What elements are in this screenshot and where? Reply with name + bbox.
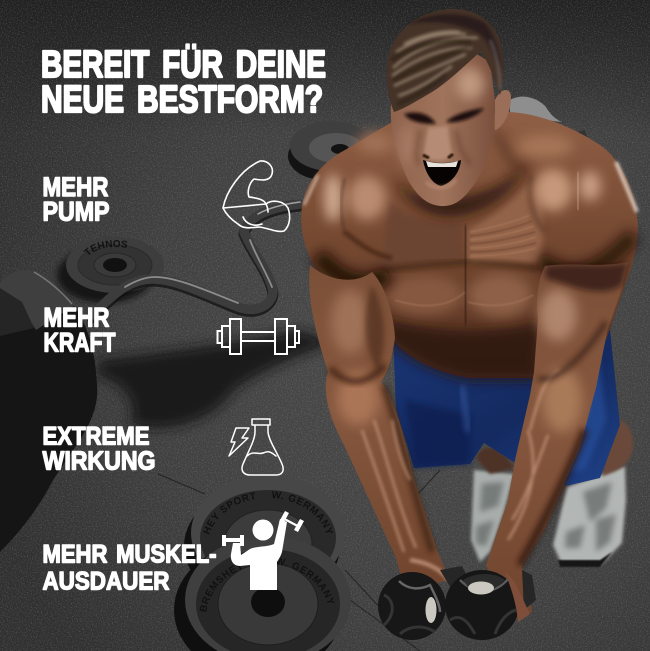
ear (495, 90, 511, 130)
weight plate, upper right of title (288, 121, 372, 180)
title (41, 43, 326, 121)
stacked weight plates, bottom (174, 476, 351, 651)
hair (387, 9, 504, 112)
mouth (423, 160, 461, 186)
benefit: extreme wirkung (42, 422, 156, 476)
knees (476, 420, 633, 476)
title: BEREIT FÜR DEINE (41, 43, 326, 86)
chest divisions (465, 225, 466, 325)
torso and shoulders (301, 112, 638, 380)
left arm (309, 265, 450, 590)
icon: dumbbell (218, 319, 299, 354)
title: NEUE BESTFORM? (41, 79, 323, 121)
benefit: mehr muskelausdauer (42, 540, 216, 596)
deltoid highlights (348, 176, 386, 220)
weight plate, left: TEHNOS (84, 240, 128, 255)
left shoe (471, 470, 514, 562)
benefit: extreme wirkung: WIRKUNG (42, 446, 156, 476)
stacked weight plates, bottom: BREMSHEY (200, 566, 241, 612)
athlete in push-up position (301, 9, 638, 640)
right shoe (553, 466, 626, 567)
weight plate, left (54, 237, 164, 306)
icon: person lifting dumbbells (222, 511, 304, 590)
right arm (486, 262, 628, 620)
benefit: extreme wirkung: EXTREME (42, 422, 150, 450)
benefit: mehr pump: PUMP (42, 196, 110, 226)
hair strands (392, 32, 478, 96)
benefit: mehr kraft: MEHR (44, 302, 110, 332)
stacked weight plates, bottom: W. GERMANY (277, 558, 335, 603)
benefit: mehr kraft (44, 302, 116, 358)
eye sockets and brows (404, 108, 484, 124)
abdominal block (387, 275, 463, 315)
icon: flask with lightning bolt (229, 419, 283, 475)
dumbbell, right hand (445, 570, 536, 640)
benefit: mehr muskelausdauer: MEHR MUSKEL- (42, 540, 216, 568)
under chin shadow (392, 160, 528, 217)
curl bar (92, 202, 300, 318)
head (387, 9, 511, 206)
stacked weight plates, bottom: HEY SPORT (203, 492, 255, 534)
forehead highlight (456, 68, 484, 100)
belly shadow (385, 318, 540, 380)
right pectoral (468, 178, 543, 264)
stacked weight plates, bottom: W. GERMANY (272, 491, 333, 533)
benefit: mehr pump: MEHR (42, 172, 108, 202)
dumbbell, left hand (378, 566, 470, 640)
icon: flexed biceps (223, 161, 290, 231)
benefit: mehr pump (42, 172, 110, 226)
large dumbbell and shadows, lower left (0, 270, 335, 552)
back dumbbell behind shoulder (510, 97, 588, 140)
benefit: mehr kraft: KRAFT (44, 328, 116, 358)
nose (424, 126, 452, 160)
blue shorts (393, 330, 620, 486)
left pectoral (382, 200, 464, 272)
arm pit shadows (540, 235, 634, 272)
benefit: mehr muskelausdauer: AUSDAUER (42, 568, 170, 596)
